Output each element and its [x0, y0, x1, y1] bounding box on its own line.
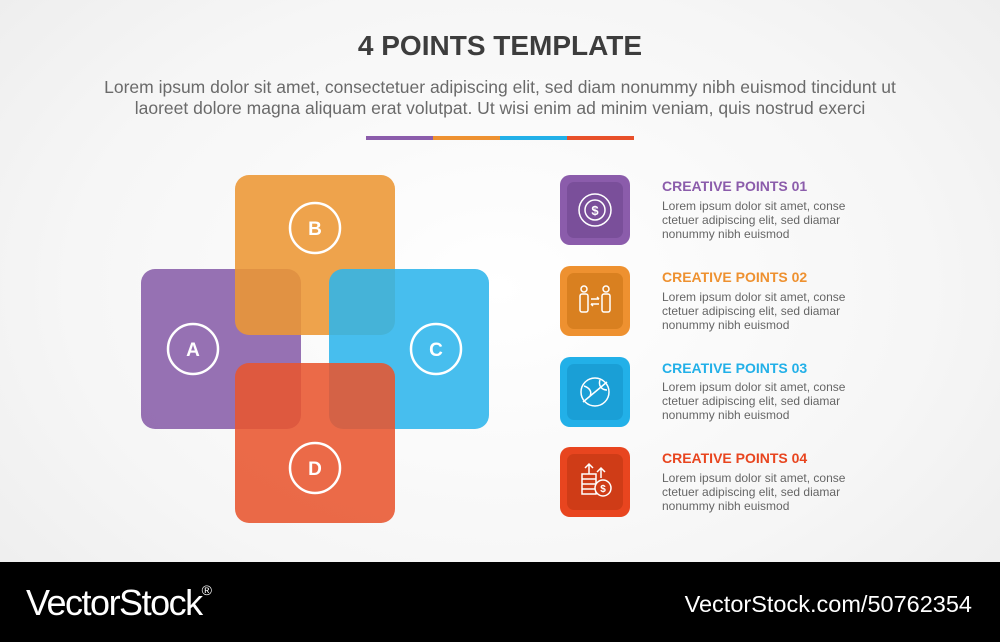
text: CREATIVE POINTS 01 — [662, 178, 807, 194]
square C — [329, 269, 489, 429]
square D: D — [308, 459, 322, 480]
square A — [141, 269, 301, 429]
text: nonummy nibh euismod — [662, 227, 789, 241]
square B — [235, 175, 395, 335]
icon 1: dollar coin — [560, 175, 630, 245]
point 2 text — [662, 269, 845, 332]
square C: C — [429, 340, 443, 361]
text: Lorem ipsum dolor sit amet, conse — [662, 380, 845, 394]
icon 1: dollar coin: $ — [591, 203, 599, 218]
text: ctetuer adipiscing elit, sed diamar — [662, 485, 840, 499]
point 4 text — [662, 450, 845, 513]
icon 2: people exchange — [560, 266, 630, 336]
icon 4: coins growth — [560, 447, 630, 517]
text: Lorem ipsum dolor sit amet, conse — [662, 290, 845, 304]
footer: VectorStock.com/50762354 — [685, 591, 972, 617]
icon 3: globe — [560, 357, 630, 427]
icon 4: coins growth: $ — [600, 484, 606, 495]
text: Lorem ipsum dolor sit amet, conse — [662, 471, 845, 485]
text: Lorem ipsum dolor sit amet, conse — [662, 199, 845, 213]
footer: VectorStock® — [26, 582, 210, 623]
subtitle text: laoreet dolore magna aliquam erat volutpat. Ut wisi enim ad minim veniam, quis nostrud exerci — [135, 98, 865, 118]
point 1 text — [662, 178, 845, 241]
text: nonummy nibh euismod — [662, 408, 789, 422]
text: ctetuer adipiscing elit, sed diamar — [662, 304, 840, 318]
square A: A — [186, 340, 200, 361]
text: CREATIVE POINTS 02 — [662, 269, 807, 285]
point 3 text — [662, 360, 845, 422]
title: 4 POINTS TEMPLATE — [358, 30, 642, 61]
footer — [0, 562, 1000, 642]
colored divider — [366, 136, 634, 140]
text: CREATIVE POINTS 04 — [662, 450, 807, 466]
text: nonummy nibh euismod — [662, 318, 789, 332]
subtitle text — [104, 77, 896, 118]
text: nonummy nibh euismod — [662, 499, 789, 513]
text: ctetuer adipiscing elit, sed diamar — [662, 394, 840, 408]
subtitle text: Lorem ipsum dolor sit amet, consectetuer adipiscing elit, sed diam nonummy nibh euismod tincidunt ut — [104, 77, 896, 97]
square D — [235, 363, 395, 523]
text: ctetuer adipiscing elit, sed diamar — [662, 213, 840, 227]
text: CREATIVE POINTS 03 — [662, 360, 807, 376]
square B: B — [308, 219, 322, 240]
